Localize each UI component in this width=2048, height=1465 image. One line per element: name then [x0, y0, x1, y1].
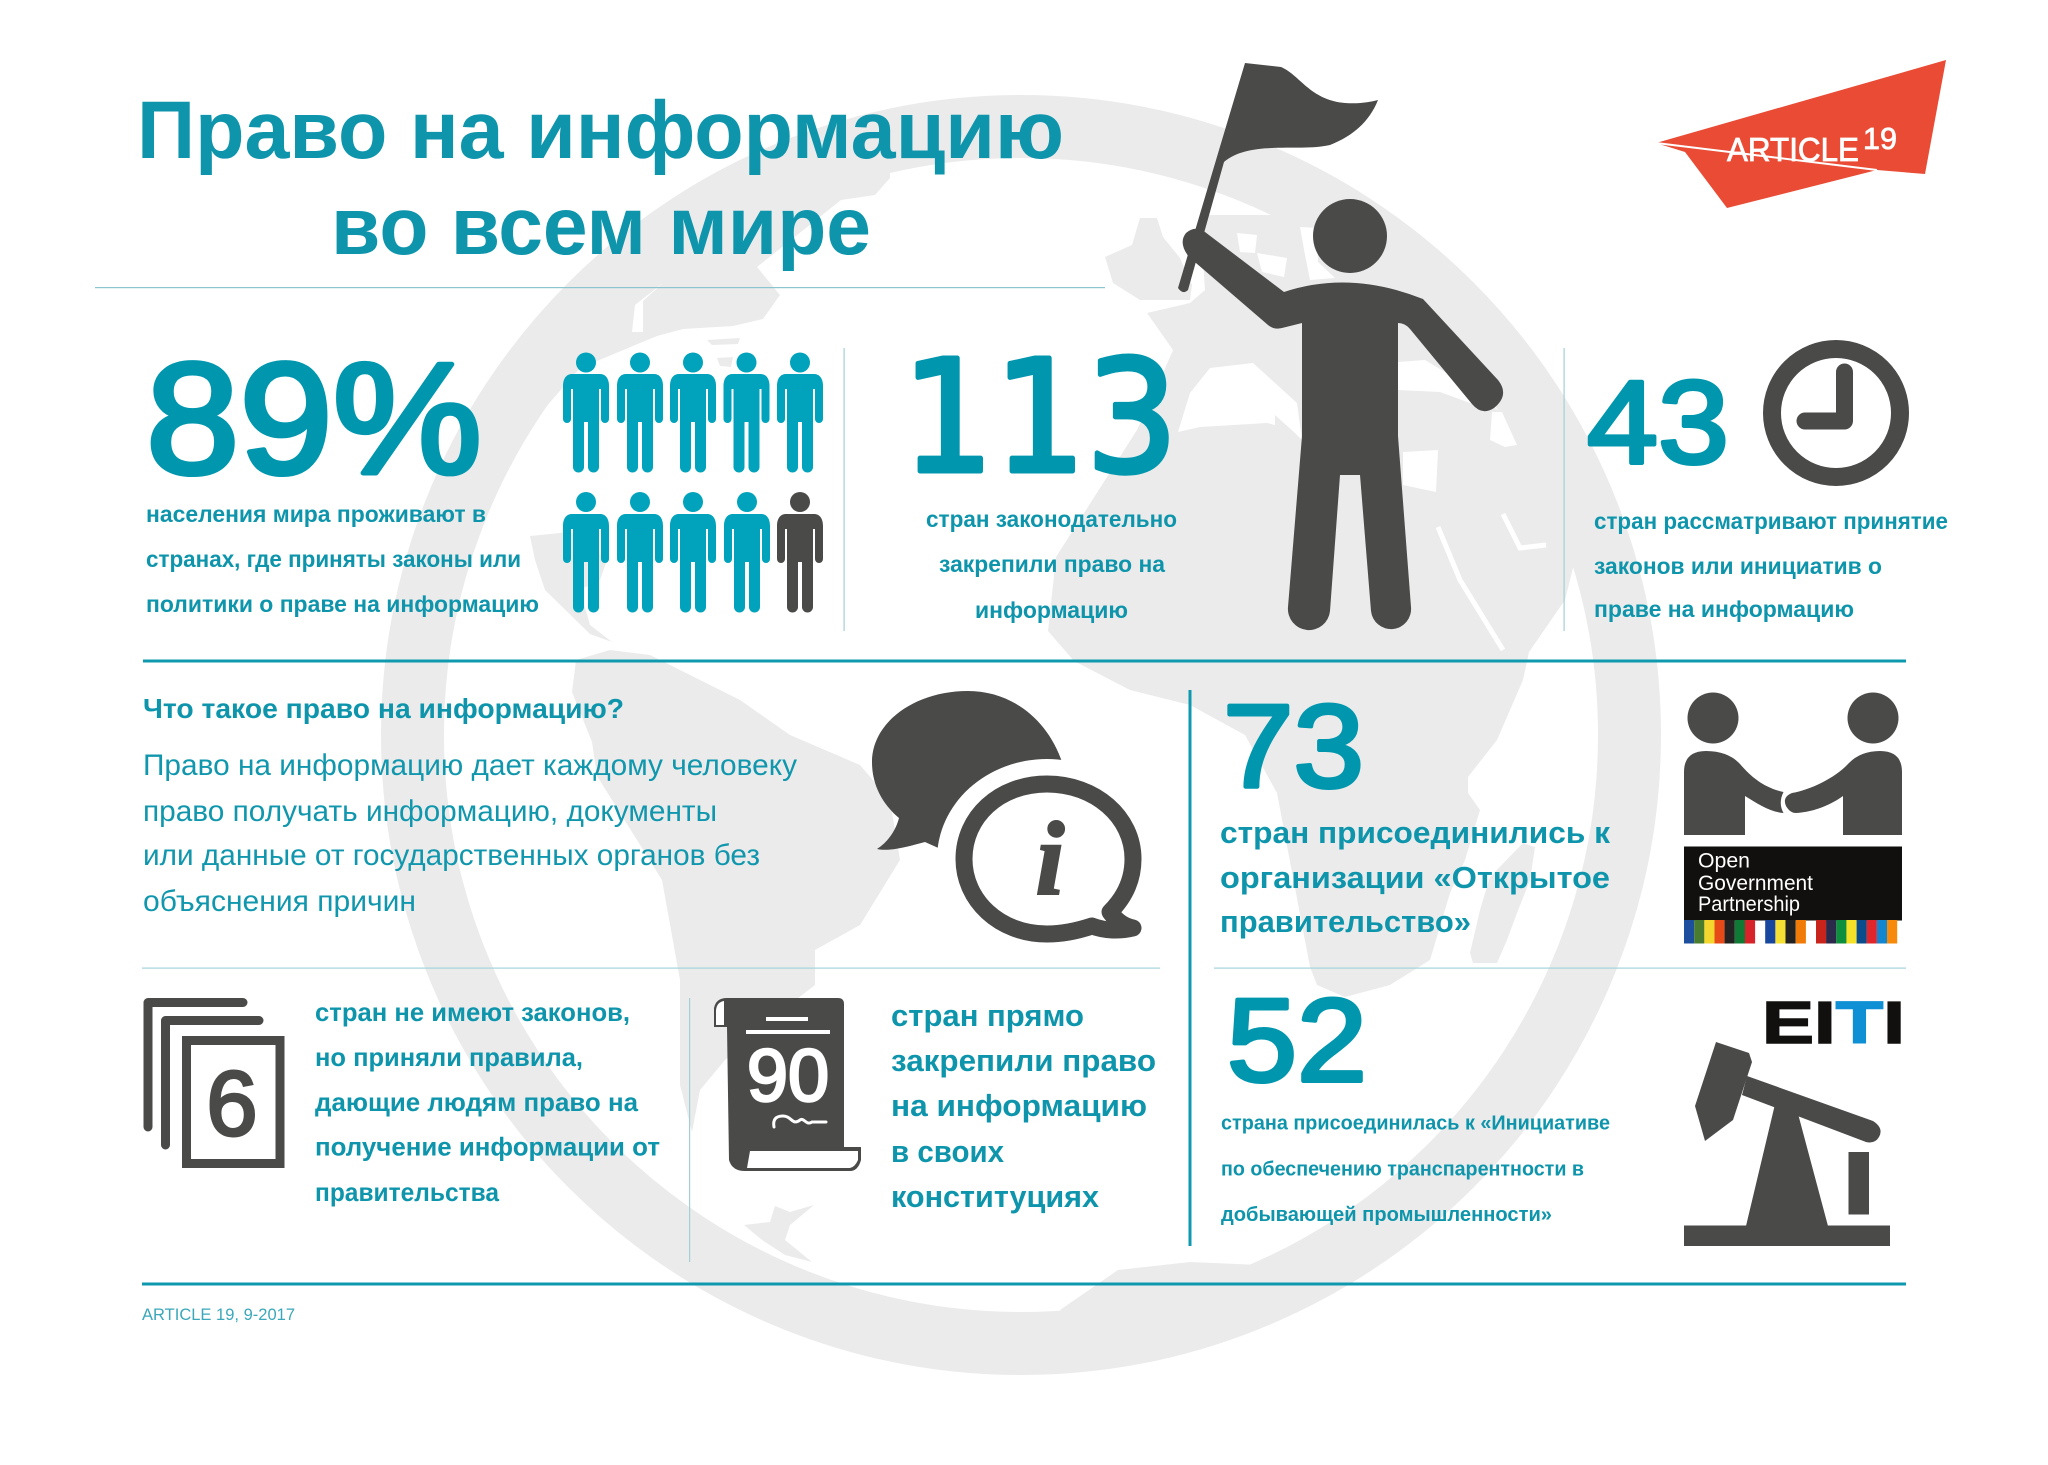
- caption 6: но приняли правила,: [315, 1042, 583, 1072]
- definition text: или данные от государственных органов без: [143, 839, 760, 872]
- title: во всем мире: [331, 181, 871, 272]
- caption 89%: населения мира проживают в: [146, 501, 486, 527]
- stat panel: 90 constitutions: [714, 998, 1156, 1214]
- logo: ARTICLE 19: [1656, 60, 1946, 208]
- head: [1313, 199, 1387, 273]
- continent: Africa and Eurasia: [1048, 215, 1580, 997]
- stat panel: 89%: [146, 331, 823, 617]
- globe ring: [412, 126, 1630, 1344]
- icon: stacked documents with 6: 6: [206, 1053, 258, 1155]
- continent: Madagascar: [1470, 843, 1535, 963]
- icon: clock: [1772, 349, 1900, 477]
- islands: Arctic: [707, 338, 740, 367]
- caption 90: конституциях: [891, 1179, 1100, 1214]
- caption 113: закрепили право на: [939, 551, 1165, 577]
- caption 113: [926, 506, 1177, 623]
- definition text: Право на информацию дает каждому человеку: [143, 749, 797, 782]
- stat panel: 52 EITI: [1221, 975, 1905, 1246]
- caption 89%: [146, 501, 539, 617]
- definition text: право получать информацию, документы: [143, 795, 717, 828]
- logo: Open Government Partnership: [1684, 846, 1902, 944]
- footer credit: ARTICLE 19, 9-2017: [142, 1305, 295, 1324]
- number 73: 73: [1223, 681, 1364, 813]
- caption 113: информацию: [975, 597, 1128, 623]
- number 89%: 89%: [146, 331, 482, 507]
- logo: Open Government Partnership: Open: [1698, 850, 1750, 872]
- caption 89%: странах, где приняты законы или: [146, 546, 521, 572]
- sea: inland patches: [1403, 412, 1517, 492]
- number 113: 113: [902, 327, 1178, 508]
- caption 73: [1220, 815, 1610, 939]
- icon: stacked documents with 6: [148, 1002, 280, 1164]
- icon: oil pump jack: [1684, 1042, 1890, 1246]
- continent: Antarctic edge: [1060, 1262, 1270, 1330]
- sea: Black Sea area: [1398, 360, 1475, 405]
- number 52: 52: [1227, 975, 1367, 1107]
- continent: North America: [480, 150, 890, 425]
- icon: scroll with 90: [714, 998, 861, 1171]
- sea: North American inlet: [632, 283, 663, 332]
- heading: Что такое право на информацию?: [143, 693, 624, 724]
- logo: Open Government Partnership: Partnership: [1698, 893, 1800, 916]
- logo: ARTICLE 19: 19: [1863, 121, 1897, 156]
- panel: what is the right to information: [143, 691, 1157, 959]
- continent: South America: [572, 650, 900, 1132]
- logo: Open Government Partnership: Government: [1698, 872, 1813, 895]
- definition text: [143, 749, 797, 918]
- caption 113: стран законодательно: [926, 506, 1177, 532]
- sea: northern European waters: [1237, 227, 1335, 280]
- stat panel: 73 Open Government: [1220, 681, 1902, 944]
- continent: Central America: [530, 532, 612, 642]
- caption 6: дающие людям право на: [315, 1087, 639, 1117]
- caption 6: [315, 997, 660, 1207]
- color stripes: [1684, 920, 1897, 944]
- title: [137, 85, 1064, 272]
- sea: Mediterranean: [1178, 363, 1302, 440]
- caption 90: на информацию: [891, 1088, 1147, 1123]
- caption 6: правительства: [315, 1177, 500, 1207]
- caption 43: праве на информацию: [1594, 596, 1854, 622]
- icon: scroll with 90: 90: [747, 1034, 829, 1117]
- caption 90: закрепили право: [891, 1043, 1156, 1078]
- continent: southern tip: [744, 1205, 814, 1262]
- caption 6: получение информации от: [315, 1132, 660, 1162]
- caption 6: стран не имеют законов,: [315, 997, 630, 1027]
- caption 52: добывающей промышленности»: [1221, 1203, 1552, 1226]
- caption 89%: политики о праве на информацию: [146, 591, 539, 617]
- caption 43: [1594, 508, 1948, 622]
- flag: [1178, 63, 1378, 292]
- caption 90: [891, 998, 1156, 1214]
- figure holding a flag: [1178, 63, 1503, 630]
- caption 90: в своих: [891, 1134, 1005, 1169]
- title rule: [95, 287, 1105, 288]
- caption 73: правительство»: [1220, 904, 1471, 939]
- number 43: 43: [1587, 357, 1729, 489]
- sea: Red Sea and gulf: [1438, 514, 1546, 650]
- caption 52: по обеспечению транспарентности в: [1221, 1158, 1584, 1180]
- stat panel: 113: [902, 327, 1178, 623]
- background globe: [412, 126, 1630, 1344]
- caption 43: законов или инициатив о: [1594, 553, 1882, 579]
- icon: speech bubbles with i: [872, 691, 1157, 959]
- logo: EITI: EI TI: [1762, 990, 1905, 1056]
- continent: British Isles: [1105, 218, 1192, 300]
- caption 73: стран присоединились к: [1220, 815, 1610, 850]
- logo: ARTICLE 19: ARTICLE: [1727, 131, 1859, 168]
- caption 52: [1221, 1112, 1610, 1226]
- title: Право на информацию: [137, 85, 1064, 176]
- icon: ten people: [563, 352, 823, 612]
- icon: speech bubbles with i: i: [1035, 800, 1065, 917]
- caption 73: организации «Открытое: [1220, 860, 1610, 895]
- stat panel: 6 countries: [148, 997, 660, 1207]
- icon: handshake: [1684, 692, 1902, 835]
- definition text: объяснения причин: [143, 885, 416, 918]
- caption 52: страна присоединилась к «Инициативе: [1221, 1112, 1610, 1134]
- caption 43: стран рассматривают принятие: [1594, 508, 1948, 534]
- body: [1183, 229, 1503, 630]
- caption 90: стран прямо: [891, 998, 1084, 1033]
- stat panel: 43: [1587, 349, 1948, 622]
